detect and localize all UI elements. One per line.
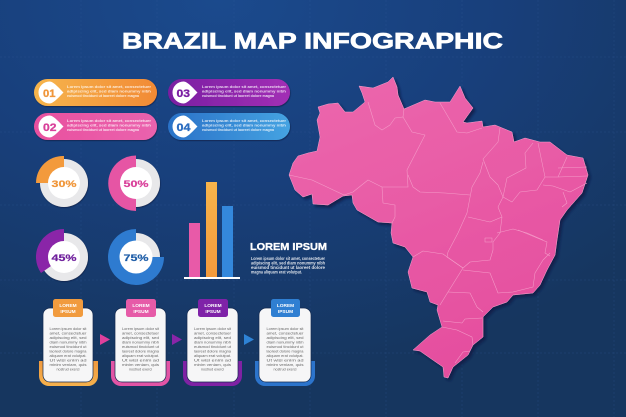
pill 04: euismod tincidunt ut laoreet dolore magna: [202, 127, 275, 132]
pill 04: [168, 113, 290, 140]
card 3: laoreet dolore magna: [194, 348, 232, 354]
donut 75%: 75%: [124, 253, 148, 263]
card 2: minim veniam, quis: [122, 362, 159, 367]
card 1: aliquam erat volutpat.: [50, 353, 86, 358]
card 2: Ut wisi enim ad: [122, 358, 159, 362]
card 3: nostrud exerci: [201, 366, 224, 372]
panel: process cards: [39, 299, 315, 386]
card 2: [111, 299, 170, 386]
card 1: nostrud exerci: [56, 366, 80, 372]
card 1: amet, consectetuer: [50, 330, 87, 336]
arrow 3: [244, 334, 254, 345]
text block: lorem ipsum: euismod tincidunt ut laoreet dolore: [251, 265, 326, 270]
card 2: diam nonummy nibh: [122, 340, 159, 344]
card 2: nostrud exerci: [129, 366, 152, 372]
card 3: Lorem ipsum dolor sit: [194, 326, 232, 331]
card 1: IPSUM: [60, 309, 76, 315]
card 3: euismod tincidunt ut: [194, 344, 232, 349]
pill 02: Lorem ipsum dolor sit amet, consectetuer: [67, 118, 152, 123]
pill 02: [34, 113, 157, 140]
pill 02: adipiscing elit, sed diam nonummy nibh: [67, 122, 152, 128]
bar chart: [184, 182, 240, 279]
pill 01: 01: [43, 88, 56, 100]
card 1: Ut wisi enim ad: [50, 358, 86, 362]
card 4: [255, 299, 315, 386]
card 2: euismod tincidunt ut: [122, 344, 160, 349]
card 1: Lorem ipsum dolor sit: [50, 326, 87, 331]
pill 02: 02: [43, 122, 56, 134]
donut 45%: 45%: [52, 253, 76, 263]
card 4: aliquam erat volutpat.: [266, 353, 304, 358]
card 4: amet, consectetuer: [266, 330, 304, 336]
pill 01: Lorem ipsum dolor sit amet, consectetuer: [67, 84, 152, 89]
card 2: aliquam erat volutpat.: [122, 353, 159, 358]
pill 03: euismod tincidunt ut laoreet dolore magna: [202, 93, 275, 98]
map of Brazil: [289, 77, 588, 378]
donut 50%: 50%: [124, 179, 148, 189]
card 3: [183, 299, 242, 386]
card 2: amet, consectetuer: [122, 330, 160, 336]
card 3: IPSUM: [205, 309, 221, 315]
pill 03: [168, 79, 290, 106]
card 4: laoreet dolore magna: [266, 348, 304, 354]
card 3: amet, consectetuer: [194, 330, 232, 336]
card 3: LOREM: [204, 303, 222, 309]
title: BRAZIL MAP INFOGRAPHIC: [122, 28, 503, 54]
card 2: IPSUM: [133, 309, 149, 315]
pill 04: adipiscing elit, sed diam nonummy nibh: [202, 122, 287, 128]
card 3: aliquam erat volutpat.: [194, 353, 231, 358]
card 4: IPSUM: [278, 309, 293, 315]
card 4: adipiscing elit, sed: [266, 335, 304, 340]
card 1: adipiscing elit, sed: [50, 335, 86, 340]
text block: lorem ipsum: LOREM IPSUM: [250, 241, 327, 253]
card 4: LOREM: [277, 303, 294, 309]
text block: lorem ipsum: Lorem ipsum dolor sit amet, consectetuer: [251, 256, 325, 261]
text block: lorem ipsum: magna aliquam erat volutpat.: [251, 270, 302, 274]
card 1: minim veniam, quis: [50, 362, 87, 367]
card 3: Ut wisi enim ad: [194, 358, 231, 362]
text block: lorem ipsum: [250, 241, 327, 274]
pill 01: adipiscing elit, sed diam nonummy nibh: [67, 88, 152, 94]
pill 02: euismod tincidunt ut laoreet dolore magna: [67, 127, 140, 132]
panel: donut charts: [36, 156, 164, 285]
pill 01: [34, 79, 157, 106]
card 4: minim veniam, quis: [266, 362, 304, 367]
card 3: diam nonummy nibh: [194, 340, 231, 344]
pill 03: 03: [176, 88, 190, 100]
pill 01: euismod tincidunt ut laoreet dolore magna: [67, 93, 140, 98]
panel: numbered pills: [34, 79, 290, 140]
card 1: diam nonummy nibh: [50, 340, 86, 344]
card 2: laoreet dolore magna: [122, 348, 160, 354]
card 1: euismod tincidunt ut: [50, 344, 87, 349]
text block: lorem ipsum: adipiscing elit, sed diam nonummy nibh: [251, 260, 325, 266]
card 4: nostrud exerci: [274, 366, 297, 372]
card 2: LOREM: [132, 303, 150, 309]
card 2: adipiscing elit, sed: [122, 335, 159, 340]
card 4: Ut wisi enim ad: [266, 358, 304, 362]
card 3: minim veniam, quis: [194, 362, 231, 367]
arrow 1: [100, 334, 110, 345]
pill 03: Lorem ipsum dolor sit amet, consectetuer: [202, 84, 287, 89]
card 1: [39, 299, 98, 386]
pill 04: Lorem ipsum dolor sit amet, consectetuer: [202, 118, 287, 123]
card 1: laoreet dolore magna: [50, 348, 87, 354]
card 2: Lorem ipsum dolor sit: [122, 326, 160, 331]
card 4: Lorem ipsum dolor sit: [266, 326, 304, 331]
card 4: diam nonummy nibh: [266, 340, 304, 344]
card 4: euismod tincidunt ut: [266, 344, 304, 349]
card 3: adipiscing elit, sed: [194, 335, 231, 340]
pill 04: 04: [176, 122, 191, 134]
donut 30%: 30%: [52, 179, 76, 189]
card 1: LOREM: [59, 303, 77, 309]
arrow 2: [172, 334, 182, 345]
pill 03: adipiscing elit, sed diam nonummy nibh: [202, 88, 287, 94]
